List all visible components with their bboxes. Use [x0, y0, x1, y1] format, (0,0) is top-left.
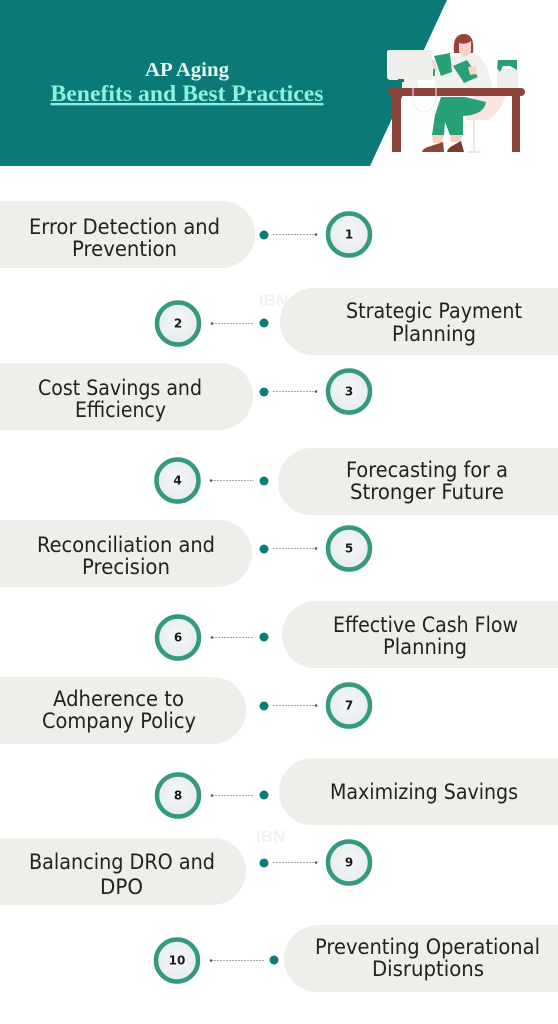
item 6: Planning	[383, 635, 467, 659]
pill 6	[282, 601, 558, 668]
item 9: DPO	[100, 875, 143, 899]
badge 9	[328, 842, 370, 884]
badge 1	[328, 214, 370, 256]
chair	[466, 96, 506, 120]
badge 3	[328, 370, 370, 412]
pill 1	[0, 201, 255, 268]
item 3	[0, 363, 370, 430]
badge 4	[156, 460, 198, 502]
badge 2: 2	[174, 316, 182, 330]
badge 5	[328, 528, 370, 570]
item 1	[0, 201, 370, 268]
green folders	[434, 53, 452, 76]
header banner	[0, 0, 447, 166]
connector 5	[260, 544, 317, 554]
badge 1: 1	[345, 228, 353, 242]
pill 3	[0, 363, 253, 430]
connector 7	[260, 702, 317, 710]
badge 10: 10	[169, 954, 185, 968]
hair and head	[454, 34, 473, 53]
item 6	[157, 601, 558, 668]
pill 5	[0, 520, 252, 587]
badge 6: 6	[174, 630, 182, 644]
connector 9	[260, 858, 317, 868]
torso	[432, 56, 492, 88]
monitor	[387, 50, 432, 80]
item 4: Stronger Future	[350, 480, 504, 504]
connector 4	[210, 476, 268, 486]
connector 6	[211, 632, 268, 642]
item 10	[156, 925, 558, 992]
legs	[432, 97, 486, 135]
connector 2	[211, 318, 268, 328]
item 1: Prevention	[72, 237, 177, 261]
badge 8	[157, 774, 199, 816]
item 7	[0, 677, 370, 744]
badge 4: 4	[173, 474, 182, 488]
label 7: Adherence to	[53, 687, 184, 711]
badge 9: 9	[345, 856, 353, 870]
label 5: Reconciliation and	[37, 533, 215, 557]
item 5	[0, 520, 370, 587]
label 1: Error Detection and	[29, 215, 220, 239]
item 4	[156, 448, 558, 515]
item 5: Precision	[82, 555, 170, 579]
label 9: Balancing DRO and	[29, 850, 215, 874]
label 6: Effective Cash Flow	[333, 613, 518, 637]
connector 8	[211, 790, 268, 800]
badge 8: 8	[174, 788, 182, 802]
pill 7	[0, 677, 246, 744]
illustration: woman at desk	[387, 34, 525, 152]
watermark: IBN top: IBN	[259, 291, 288, 310]
item 9	[0, 838, 370, 905]
pill 4	[278, 448, 558, 515]
label 2: Strategic Payment	[346, 299, 522, 323]
badge 7	[328, 684, 370, 726]
badge 3: 3	[345, 384, 353, 398]
shoes	[422, 142, 444, 152]
label 3: Cost Savings and	[38, 376, 202, 400]
badge 6	[157, 616, 199, 658]
badge 5: 5	[345, 542, 353, 556]
desk	[388, 88, 525, 96]
title: AP Aging: AP Aging	[145, 59, 229, 81]
connector 3	[260, 388, 317, 396]
item 3: Efficiency	[75, 398, 166, 422]
item 8	[157, 758, 558, 825]
pill 10	[284, 925, 558, 992]
item 2	[157, 288, 558, 355]
badge 7: 7	[345, 698, 353, 712]
connector 10	[210, 956, 278, 964]
pill 8	[279, 758, 558, 825]
badge 2	[157, 302, 199, 344]
label 10: Preventing Operational	[315, 935, 540, 959]
item 7: Company Policy	[42, 709, 196, 733]
cable	[413, 88, 436, 112]
connector 1	[260, 230, 317, 240]
paper stack and money	[497, 69, 518, 88]
badge 10	[156, 940, 198, 982]
pill 9	[0, 838, 246, 905]
watermark: IBN bottom: IBN	[256, 827, 285, 846]
subtitle: Benefits and Best Practices: Benefits and Best Practices	[50, 81, 324, 106]
item 10: Disruptions	[372, 957, 484, 981]
pill 2	[280, 288, 558, 355]
label 8: Maximizing Savings	[330, 780, 518, 804]
label 4: Forecasting for a	[346, 458, 508, 482]
item 2: Planning	[392, 322, 476, 346]
